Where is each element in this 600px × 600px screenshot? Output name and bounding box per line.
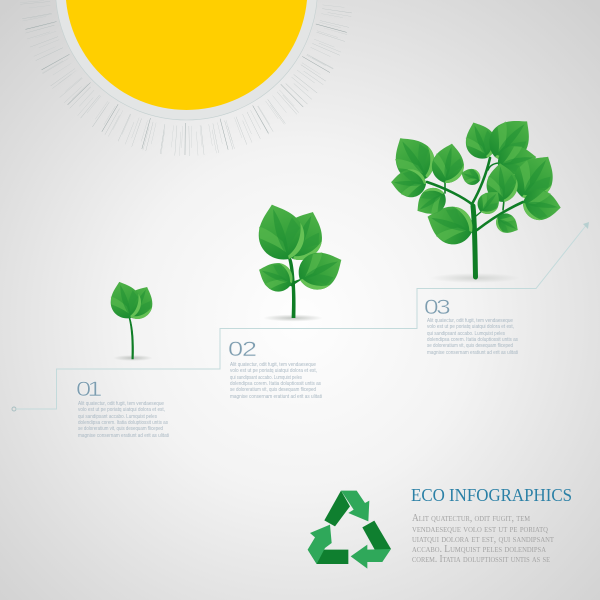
trunk and branches [427, 158, 523, 277]
description text: accabo. Lumquist peles dolendipsa [412, 544, 546, 555]
leaves [384, 128, 443, 189]
description text [412, 513, 555, 565]
step 3 number: 03 [424, 295, 450, 319]
description text: corem. Itatia doluptiossit untis as se [412, 554, 550, 565]
sun with rays [32, 0, 342, 144]
step 3 text: qui sandipsant accabo. Lumquist peles [427, 331, 505, 337]
top arrow [324, 491, 369, 526]
stem and branches [283, 258, 301, 318]
description text: uiatqui dolora et est, qui sandipsant [412, 534, 555, 545]
sun disc [66, 0, 308, 110]
step 2 text: se doloreratium vit, quis desequam fliceped [230, 387, 316, 393]
plant 3: tree [384, 108, 564, 283]
description text: Alit quatectur, odit fugit, tem [412, 513, 531, 524]
ground shadow [263, 314, 323, 322]
step 1 text: dolendipsa corem. Itatia doluptiossit untis as [78, 420, 168, 426]
step 1 text: qui sandipsant accabo. Lumquist peles [78, 414, 157, 420]
step 2 text: volo est ut pe poriatq uiatqui dolora et est, [230, 368, 317, 374]
step 2 text: magnise consernam eratiunt ad erit as ulitati [230, 394, 322, 400]
step 3 text: Alit quatectur, odit fugit, tem vendaeseque [427, 318, 513, 324]
step 2 text: Alit quatectur, odit fugit, tem vendaeseque [230, 362, 316, 368]
step 1 number: 01 [76, 378, 102, 401]
step 2 number: 02 [228, 338, 256, 361]
step 3 text: dolendipsa corem. Itatia doluptiossit untis as [427, 337, 518, 343]
icon: recycle symbol [308, 491, 391, 569]
plant 2 [250, 198, 349, 322]
sun rays [32, 0, 342, 144]
step 2 text: qui sandipsant accabo. Lumquist peles [230, 375, 302, 381]
step 3 text: se doloreratium vit, quis desequam fliceped [427, 343, 513, 349]
step 2 text: dolendipsa corem. Itatia doluptiossit untis as [230, 381, 321, 387]
description text: vendaeseque volo est ut pe poriatq [412, 524, 548, 535]
leaves [274, 204, 332, 267]
step 1 text [78, 401, 169, 439]
title: ECO INFOGRAPHICS [411, 485, 572, 505]
sun ring [56, 0, 318, 120]
right arrow [351, 521, 391, 569]
step 3 text: magnise consernam eratiunt ad erit as ulitati [427, 350, 518, 356]
left arrow [308, 525, 348, 564]
step 1 text: se doloreratium vit, quis desequam fliceped [78, 426, 163, 432]
ground shadow [113, 355, 153, 361]
step 1 text: magnise consernam eratiunt ad erit as ulitati [78, 433, 169, 439]
step 3 text: volo est ut pe poriatq uiatqui dolora et est, [427, 324, 514, 330]
stepped growth line with arrow [12, 222, 589, 411]
step 1 text: Alit quatectur, odit fugit, tem vendaeseque [78, 401, 164, 407]
leaves [120, 281, 159, 324]
stem [129, 318, 134, 359]
ground shadow [430, 273, 520, 283]
plant 1 [105, 277, 159, 361]
step 2 text [230, 362, 322, 400]
step 3 text [427, 318, 518, 356]
step 1 text: volo est ut pe poriatq uiatqui dolora et est, [78, 407, 165, 413]
